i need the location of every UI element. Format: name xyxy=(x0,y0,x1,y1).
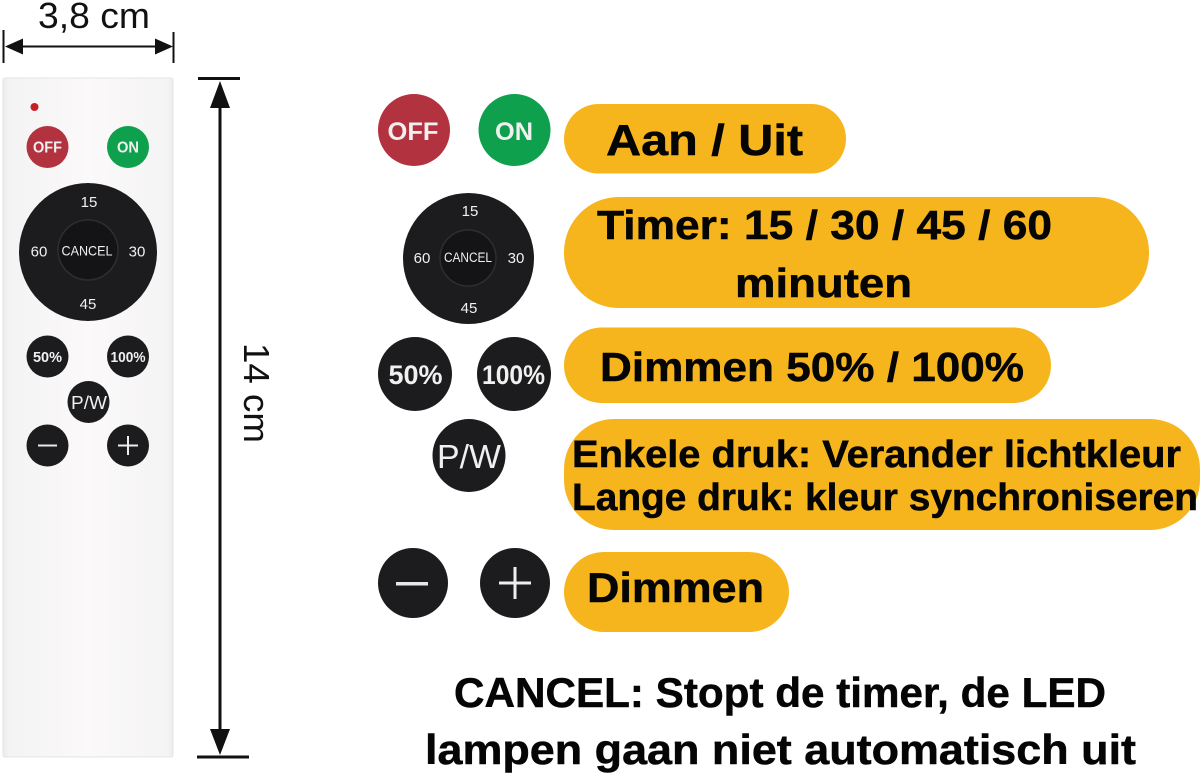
label: Aan / Uit: Aan / Uit xyxy=(606,116,803,165)
remote OFF button: OFF xyxy=(33,140,62,156)
icon: ON button: ON xyxy=(495,118,533,146)
icon: timer dial xyxy=(403,193,534,324)
remote 50% button xyxy=(26,336,68,378)
icon: minus button xyxy=(378,548,448,618)
remote timer dial xyxy=(19,183,157,321)
label: timer minutes: Timer: 15 / 30 / 45 / 60 xyxy=(597,202,1052,248)
label: Dimmen 50% / 100%: Dimmen 50% / 100% xyxy=(600,344,1024,390)
remote ON button xyxy=(107,126,149,168)
row: P/W xyxy=(432,419,1200,530)
icon: timer dial: 60 xyxy=(414,250,430,267)
remote timer dial: 30 xyxy=(129,244,145,260)
icon: P/W button: P/W xyxy=(437,438,502,475)
row: on / off xyxy=(378,94,846,174)
label: Dimmen 50% / 100% xyxy=(564,328,1051,403)
icon: ON button xyxy=(478,94,550,166)
remote 50% button: 50% xyxy=(33,349,62,366)
height dimension: 14 cm: 14 cm xyxy=(236,343,277,443)
label: press actions xyxy=(564,419,1200,530)
icon: 50% button: 50% xyxy=(388,360,442,390)
row: dim presets xyxy=(378,328,1051,411)
label: Dimmen: Dimmen xyxy=(587,564,764,611)
icon: OFF button: OFF xyxy=(388,118,438,146)
row: timer xyxy=(403,193,1149,324)
icon: 100% button xyxy=(477,337,551,411)
label: Aan / Uit xyxy=(564,104,846,174)
status LED xyxy=(30,103,38,111)
cancel note xyxy=(425,669,1136,773)
icon: timer dial: 15 xyxy=(462,203,478,220)
remote timer dial: 60 xyxy=(31,244,47,260)
label: press actions: Enkele druk: Verander lichtkleur xyxy=(572,434,1181,476)
label: Dimmen xyxy=(564,552,789,632)
icon: timer dial: 45 xyxy=(461,300,477,317)
remote P/W button: P/W xyxy=(71,393,107,413)
row: dimming xyxy=(378,548,789,632)
remote ON button: ON xyxy=(117,140,139,156)
cancel note: CANCEL: Stopt de timer, de LED xyxy=(454,669,1106,716)
icon: timer dial: 30 xyxy=(508,250,524,267)
remote body xyxy=(3,78,173,757)
remote timer dial: 45 xyxy=(80,296,96,313)
icon: P/W button xyxy=(432,419,506,492)
icon: 50% button xyxy=(378,337,452,411)
icon: OFF button xyxy=(378,94,450,166)
remote plus button xyxy=(107,424,149,466)
icon: plus button xyxy=(480,548,550,618)
label: press actions: Lange druk: kleur synchroniseren xyxy=(572,477,1198,519)
remote minus button xyxy=(26,424,68,466)
remote 100% button xyxy=(107,336,149,378)
remote 100% button: 100% xyxy=(110,349,146,366)
label: timer minutes: minuten xyxy=(735,260,912,306)
cancel note: lampen gaan niet automatisch uit xyxy=(425,726,1136,773)
remote P/W button xyxy=(68,381,110,423)
remote OFF button xyxy=(26,126,68,168)
remote timer dial: CANCEL xyxy=(62,242,113,258)
height dimension: 14 cm xyxy=(197,78,277,757)
label: timer minutes xyxy=(564,197,1149,308)
icon: 100% button: 100% xyxy=(482,360,545,390)
width dimension: 3,8 cm xyxy=(4,0,174,63)
remote timer dial: 15 xyxy=(81,194,97,211)
remote control xyxy=(3,78,173,757)
icon: timer dial: CANCEL xyxy=(444,250,492,265)
